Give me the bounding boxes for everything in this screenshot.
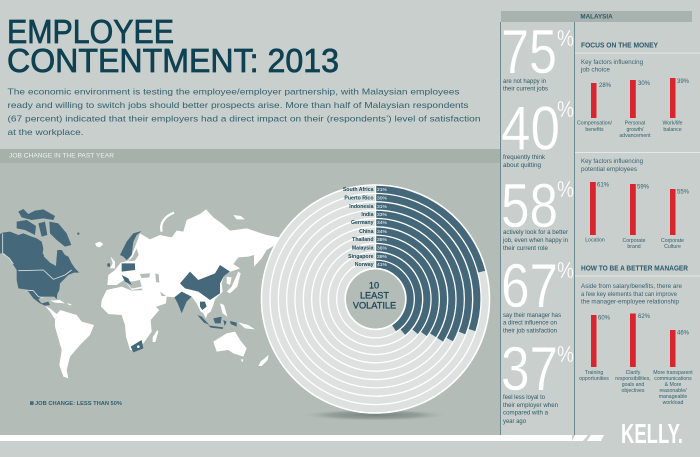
- chart: better manager: More transparent: [653, 370, 693, 376]
- chart: better manager: Aside from salary/benefits, there are: [581, 283, 682, 290]
- chart: potential employees: brand: [627, 244, 641, 250]
- stat: 75 percent: their current jobs: [503, 86, 548, 92]
- chart labels: Germany: [351, 220, 374, 226]
- chart: better manager: the manager-employee relationship: [581, 298, 679, 306]
- heading: how to be a better manager: HOW TO BE A BETTER MANAGER: [581, 264, 689, 272]
- chart centre label: VOLATILE: [353, 300, 396, 310]
- stat: 40 percent: %: [557, 96, 574, 122]
- chart labels: 34%: [377, 220, 387, 226]
- chart labels: South Africa: [343, 187, 374, 193]
- section heading: job change: [0, 149, 500, 163]
- chart: better manager: a few key elements that can improve: [581, 291, 677, 298]
- panel: Malaysia heading: MALAYSIA: [580, 14, 613, 20]
- chart labels: 31%: [377, 204, 387, 210]
- chart: better manager: responsibilities,: [615, 376, 651, 382]
- chart labels: 34%: [377, 229, 387, 235]
- chart labels: Malaysia: [352, 246, 374, 252]
- chart: job choice: Work/life: [662, 120, 683, 126]
- stat: 37 percent: compared with a: [503, 410, 548, 416]
- stat: 67 percent: 67: [501, 252, 558, 321]
- chart labels: Puerto Rico: [344, 196, 374, 202]
- chart: better manager: objectives: [621, 388, 645, 394]
- chart: better manager: 46%: [677, 330, 690, 336]
- title: EMPLOYEE: [7, 13, 174, 50]
- column dividers: [500, 22, 575, 435]
- stat: 37 percent: feel less loyal to: [503, 394, 545, 401]
- chart: potential employees: Location: [585, 238, 605, 244]
- chart labels: 39%: [377, 254, 387, 260]
- stat: 37 percent: their employer when: [503, 402, 558, 409]
- stat: 37 percent: 37: [501, 335, 558, 404]
- stat: 67 percent: their job satisfaction: [503, 328, 557, 334]
- chart labels: 36%: [377, 246, 387, 252]
- chart: job choice: Key factors influencing: [581, 59, 643, 66]
- chart labels: Thailand: [352, 237, 374, 243]
- chart labels: Norway: [355, 262, 374, 268]
- stat: 40 percent: 40: [501, 94, 560, 164]
- chart labels: [343, 187, 387, 268]
- chart centre label: [353, 280, 396, 310]
- chart: better manager: 60%: [598, 316, 611, 322]
- chart: job choice: benefits: [585, 127, 604, 133]
- chart: potential employees: 61%: [597, 182, 610, 188]
- chart: potential employees: 55%: [677, 190, 690, 196]
- chart: potential employees: [581, 158, 690, 250]
- chart: potential employees: Corporate: [622, 238, 646, 244]
- stat: 37 percent: %: [557, 341, 574, 367]
- chart: better manager: goals and: [622, 382, 644, 388]
- chart: better manager: Clarify: [626, 370, 641, 376]
- chart: job choice: 30%: [638, 81, 651, 87]
- world map: [0, 209, 279, 378]
- chart labels: China: [359, 229, 374, 235]
- stat: 58 percent: %: [557, 176, 574, 202]
- intro paragraph: The economic environment is testing the employee/employer partnership, with Malaysian employees: [8, 86, 460, 96]
- stat: 37 percent: year ago: [503, 418, 526, 425]
- chart: job choice: advancement: [619, 133, 651, 139]
- intro paragraph: [8, 86, 481, 137]
- panel: job change map: [0, 149, 500, 435]
- stat: 75 percent: are not happy in: [503, 78, 546, 85]
- chart: potential employees: Culture: [664, 244, 681, 250]
- title: [7, 13, 339, 79]
- chart: better manager: workload: [663, 400, 683, 406]
- chart: job choice: growth/: [626, 127, 644, 133]
- stat: 58 percent: their current role: [503, 245, 548, 252]
- chart: better manager: opportunities: [579, 376, 609, 382]
- chart: better manager: reasonable/: [659, 388, 687, 394]
- chart centre label: 10: [369, 280, 379, 290]
- stat: 67 percent: a direct influence on: [503, 320, 557, 326]
- heading: focus on the money: FOCUS ON THE MONEY: [581, 40, 658, 50]
- stat: 75 percent: 75: [501, 18, 557, 87]
- decorative bottom stripe: [0, 435, 604, 441]
- chart: potential employees: potential employees: [581, 166, 638, 173]
- chart labels: Singapore: [348, 254, 374, 260]
- chart centre label: LEAST: [360, 290, 389, 300]
- title: CONTENTMENT: 2013: [7, 42, 339, 79]
- chart labels: India: [361, 212, 374, 218]
- stat: 67 percent: %: [557, 257, 574, 283]
- stat: 67 percent: say their manager has: [503, 312, 561, 319]
- stat: 58 percent: 58: [501, 172, 558, 241]
- stat: 75 percent: %: [557, 25, 574, 51]
- chart: potential employees: 59%: [637, 184, 650, 190]
- intro paragraph: at the workplace.: [8, 127, 84, 137]
- stat: 58 percent: actively look for a better: [503, 229, 569, 236]
- chart: job choice: balance: [663, 127, 682, 133]
- panel: Malaysia heading: [501, 11, 692, 22]
- stat: 40 percent: about quitting: [503, 162, 541, 169]
- chart: better manager: 62%: [638, 314, 651, 320]
- stat: 40 percent: frequently think: [503, 154, 546, 161]
- chart labels: 30%: [377, 196, 387, 202]
- intro paragraph: (67 percent) indicated that their employers had a direct impact on their (respondents’) level of satisfaction: [8, 114, 481, 124]
- radial chart: 10 least volatile: [261, 184, 490, 421]
- chart: potential employees: Key factors influencing: [581, 158, 643, 165]
- intro paragraph: ready and willing to switch jobs should better prospects arise. More than half of Malaysian respondents: [8, 100, 468, 110]
- chart: better manager: communications: [654, 376, 692, 382]
- section heading: job change: JOB CHANGE IN THE PAST YEAR: [9, 152, 115, 160]
- chart: better manager: & More: [665, 382, 681, 388]
- chart: job choice: Personal: [625, 120, 645, 126]
- heading: focus on the money: [575, 40, 700, 54]
- chart: better manager: Training: [585, 370, 603, 376]
- chart labels: Indonesia: [349, 204, 374, 210]
- chart: better manager: manageable: [659, 394, 687, 400]
- chart labels: 21%: [377, 187, 387, 193]
- chart: job choice: job choice: [580, 66, 610, 74]
- chart: better manager: [579, 283, 693, 406]
- chart labels: 33%: [377, 212, 387, 218]
- stat: 58 percent: job, even when happy in: [502, 237, 568, 244]
- chart: job choice: 39%: [677, 79, 690, 85]
- chart: job choice: Compensation/: [577, 120, 612, 126]
- map legend: JOB CHANGE: LESS THAN 50%: [35, 401, 122, 407]
- chart: job choice: 28%: [599, 83, 612, 89]
- chart: job choice: [577, 59, 690, 139]
- chart: potential employees: Corporate: [661, 238, 684, 244]
- chart labels: 41%: [377, 262, 387, 268]
- heading: how to be a better manager: [575, 264, 700, 276]
- chart labels: 35%: [377, 237, 387, 243]
